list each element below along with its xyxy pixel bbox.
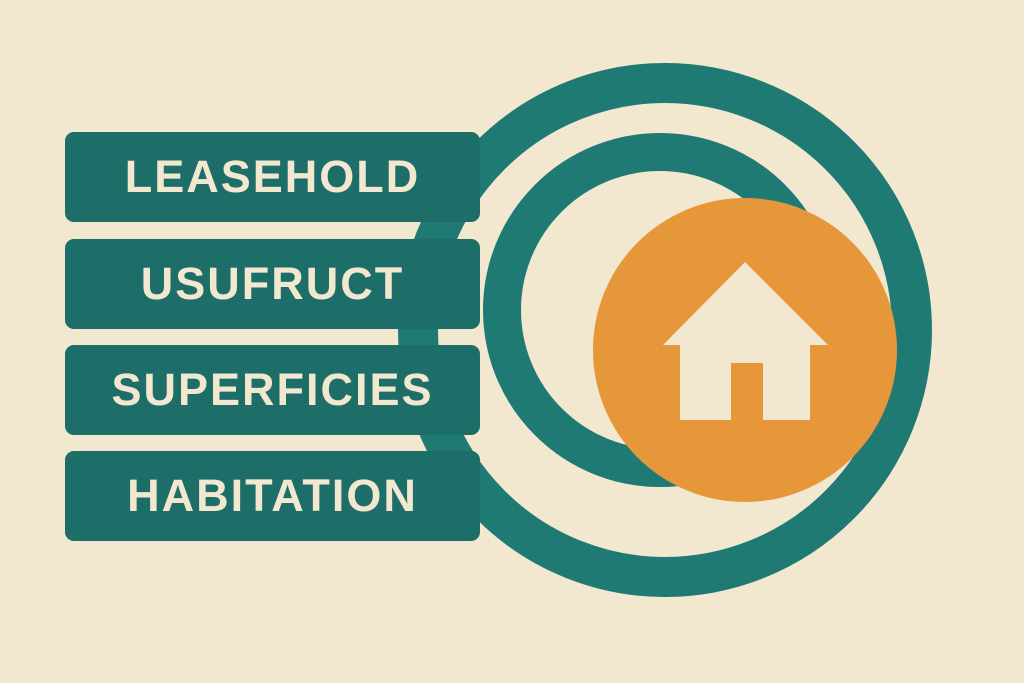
orange circle with house <box>593 198 897 502</box>
outer ring <box>418 83 912 577</box>
label: superficies: SUPERFICIES <box>111 364 434 415</box>
label: habitation: HABITATION <box>127 470 418 521</box>
inner ring <box>502 152 818 468</box>
label: habitation <box>65 451 480 541</box>
label: superficies <box>65 345 480 435</box>
label: leasehold <box>65 132 480 222</box>
label: usufruct <box>65 239 480 329</box>
icon: house <box>663 262 828 420</box>
label: usufruct: USUFRUCT <box>141 258 404 309</box>
label: leasehold: LEASEHOLD <box>125 151 420 202</box>
